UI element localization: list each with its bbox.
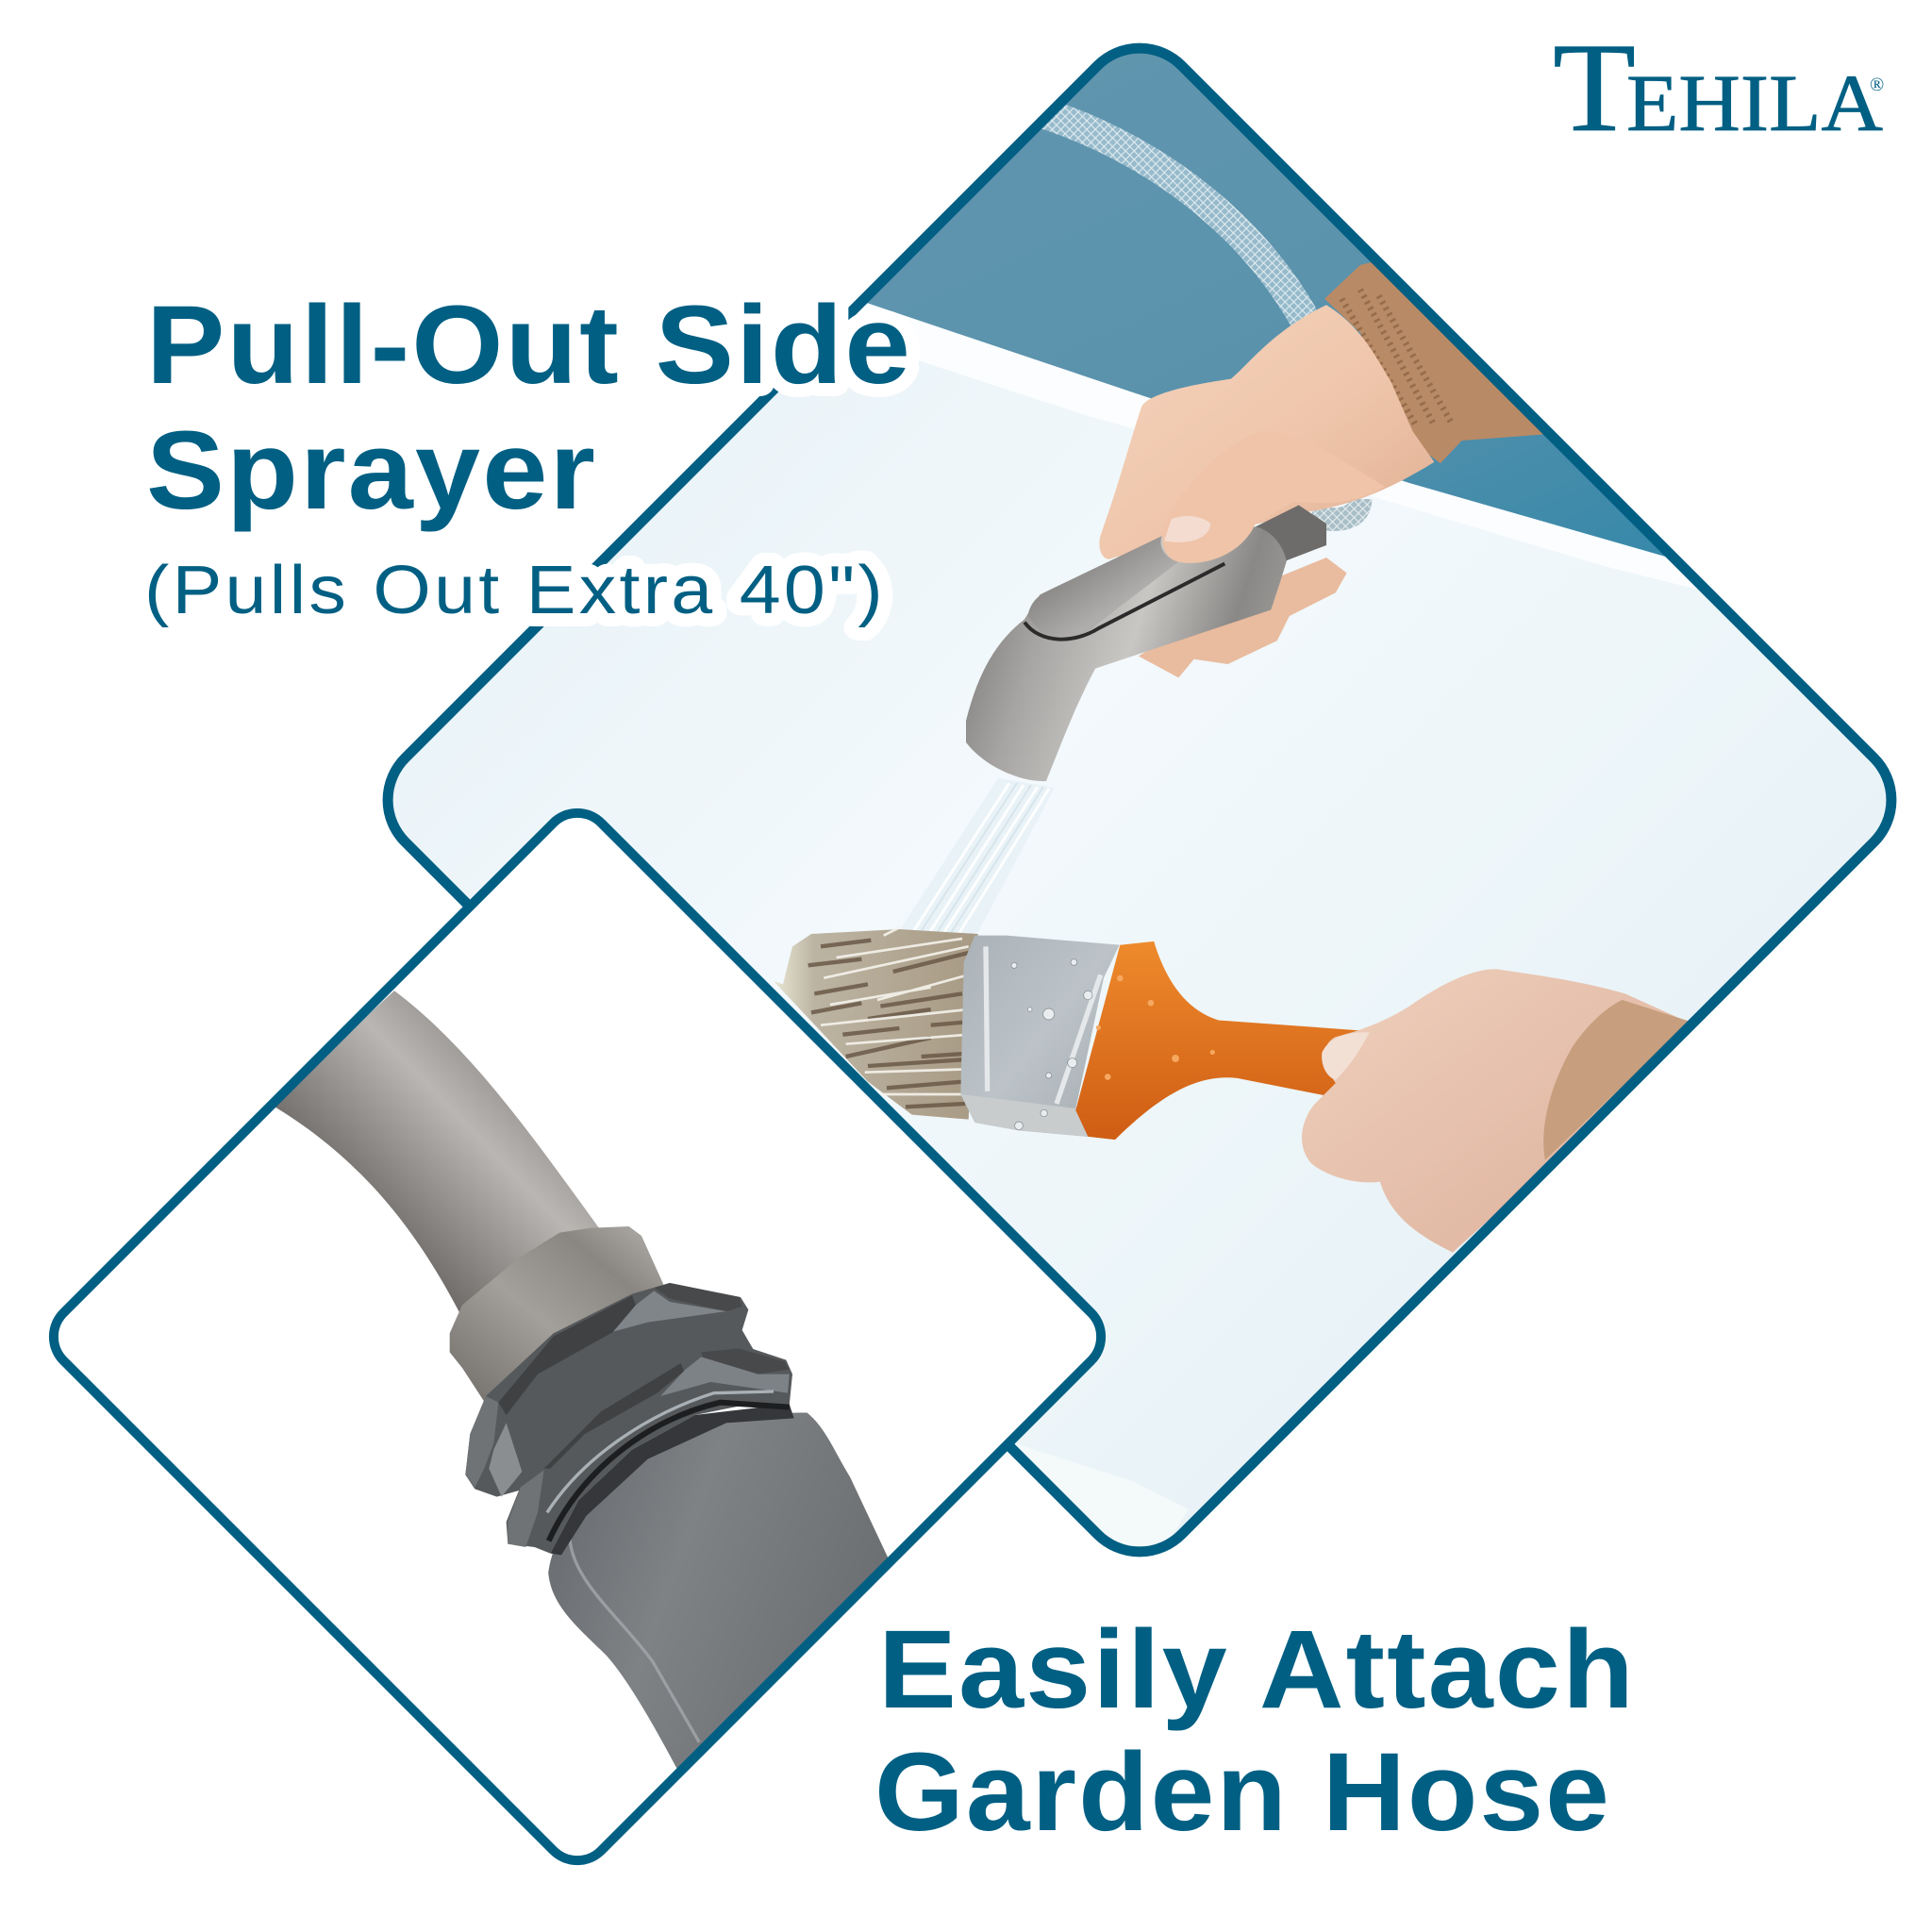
threaded nut assembly: [450, 1226, 794, 1555]
handle droplets: [1096, 975, 1215, 1080]
thumb: [1162, 475, 1385, 563]
logo: Tehila: ®: [1870, 75, 1884, 95]
upper nut flat: [498, 1295, 636, 1415]
subheading: pulls out extra 40 inches: (Pulls Out Extra 40"): [144, 553, 886, 628]
sprayer collar: [1256, 506, 1326, 560]
logo: Tehila: EHILA: [1626, 58, 1883, 148]
ferrule droplets: [1011, 959, 1092, 1130]
lower nut right flat: [701, 1348, 790, 1374]
upper nut light facet: [613, 1291, 726, 1332]
nut backing: [465, 1283, 792, 1554]
sprayer top button: [1027, 536, 1178, 637]
sprayer body: [966, 506, 1326, 781]
light bristle strands: [821, 927, 969, 1094]
small diamond border: [54, 813, 1101, 1860]
lower hand: [1302, 969, 1687, 1253]
button seam: [1024, 564, 1224, 640]
lower fingers: [1139, 558, 1347, 677]
band highlight: [489, 1423, 522, 1497]
body reflection: [570, 1539, 699, 1742]
hose and upper hand: [966, 102, 1545, 781]
panel: garden hose connection diamond: [54, 813, 1101, 1860]
heading: pull-out side sprayer: Sprayer: [146, 408, 597, 533]
heading: easily attach garden hose: Easily Attach: [878, 1607, 1636, 1732]
heading: easily attach garden hose: [874, 1607, 1636, 1855]
logo: Tehila: [1553, 18, 1884, 158]
hose upper: [1003, 102, 1302, 314]
black gasket: [549, 1403, 790, 1541]
thumbnail: [1164, 516, 1210, 542]
water spray: [891, 778, 1055, 953]
sink front lip: [1015, 1443, 1189, 1546]
bristles: [774, 929, 978, 1120]
dark seat under nut: [550, 1404, 794, 1555]
upper nut left facet: [465, 1396, 498, 1488]
lower nut left facet: [508, 1470, 544, 1547]
heading: pull-out side sprayer: Pull-Out Side: [146, 283, 912, 408]
paint brush: [774, 927, 1690, 1253]
blue wall: [868, 53, 1666, 557]
ferrule: [960, 936, 1120, 1137]
lower cuff: [1543, 1000, 1690, 1160]
large diamond border: [388, 48, 1891, 1552]
heading: pull-out side sprayer: [146, 283, 912, 533]
sink rim: [857, 303, 1698, 590]
ferrule seams: [986, 946, 1101, 1104]
hose lower: [1311, 499, 1360, 519]
upper nut right flat: [654, 1283, 742, 1311]
lower thumbnail: [1322, 1032, 1370, 1080]
back of hand: [1099, 305, 1434, 559]
sink basin background: [392, 360, 1887, 1536]
logo: Tehila: T: [1553, 18, 1636, 158]
cuff ribs: [1341, 290, 1453, 425]
ferrule lower lip: [960, 1094, 1088, 1137]
faucet pipe: [271, 991, 599, 1329]
ring highlight: [547, 1391, 774, 1512]
panel: side sprayer photo diamond: [358, 19, 1924, 1585]
heading: easily attach garden hose: Garden Hose: [874, 1730, 1611, 1855]
sweater cuff: [1324, 262, 1545, 463]
gray hose body: [548, 1412, 899, 1791]
lower nut light facet: [660, 1357, 790, 1396]
handle: [1075, 941, 1363, 1140]
pipe collar: [450, 1226, 663, 1404]
dark bristle strands: [808, 941, 969, 1107]
lower nut flat: [544, 1363, 684, 1469]
